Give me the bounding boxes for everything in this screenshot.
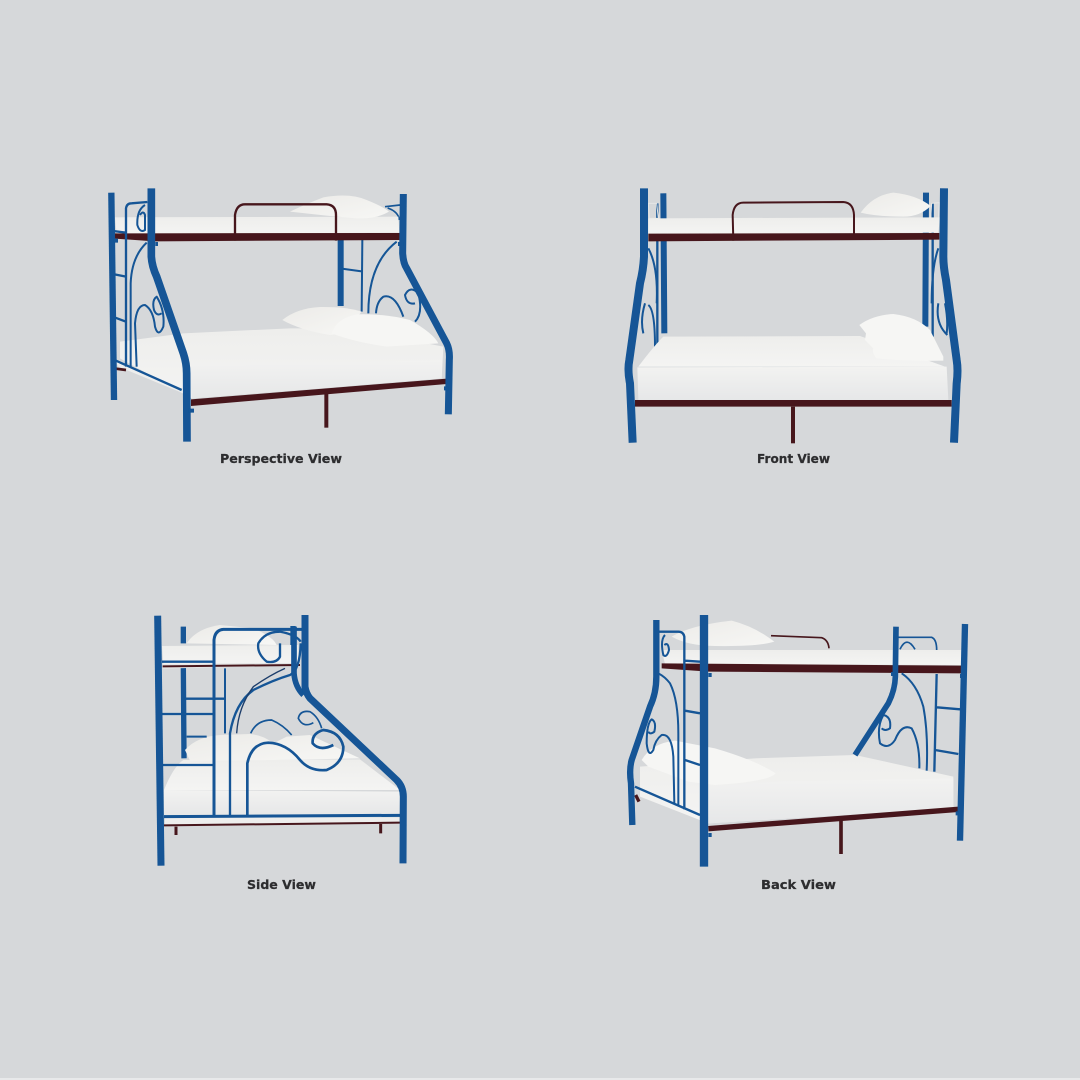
guard rail [235, 204, 336, 241]
upper mattress [115, 217, 399, 234]
back ladder post [332, 240, 350, 306]
bed: front view [628, 188, 957, 443]
upper mattress [662, 650, 962, 665]
upper pillow [861, 193, 931, 217]
main posts [294, 627, 303, 695]
upper frame [163, 664, 300, 669]
upper frame [648, 233, 939, 241]
main posts [855, 627, 896, 755]
lower mattress [164, 759, 400, 790]
back posts [663, 193, 926, 333]
upper mattress [648, 217, 940, 234]
scrolls [642, 248, 947, 347]
back post [175, 627, 192, 758]
guard rail [771, 636, 829, 648]
main posts [111, 193, 114, 400]
ladders and scrolls [635, 632, 700, 815]
lower pillow [859, 314, 943, 361]
bed: side view [158, 615, 403, 866]
upper mattress [162, 645, 298, 664]
upper pillow [187, 625, 277, 645]
lower frame and leg [635, 400, 952, 407]
label: perspective view: Perspective View [220, 451, 342, 466]
lower pillow [185, 734, 360, 761]
lower frame and leg [191, 379, 447, 406]
upper frame [115, 233, 400, 241]
bed: back view [630, 615, 965, 867]
upper pillow [290, 196, 389, 218]
upper frame [662, 663, 962, 673]
lower pillows [282, 307, 362, 335]
lower mattress [638, 336, 945, 367]
label: back view: Back View [761, 877, 836, 892]
label: side view: Side View [247, 877, 316, 892]
bed: perspective view [111, 188, 449, 442]
lower mattress [120, 328, 443, 398]
main posts [628, 188, 644, 443]
lower pillow [642, 741, 776, 785]
ladder and scrolls [113, 202, 182, 390]
lower frame and feet [164, 823, 400, 825]
lower mattress [640, 755, 953, 823]
upper pillow [672, 621, 774, 646]
right rear details [897, 637, 937, 650]
label: front view: Front View [757, 451, 830, 466]
ladder and scrolls [214, 629, 303, 815]
guard rail [733, 202, 854, 241]
lower frame and leg [708, 809, 958, 829]
